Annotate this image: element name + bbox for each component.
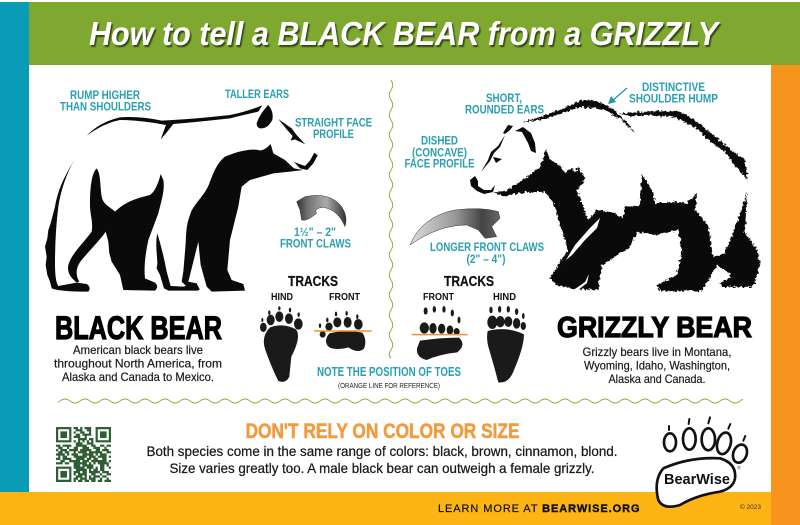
note on toes: (ORANGE LINE FOR REFERENCE) xyxy=(338,381,440,390)
text: black bear range: American black bears live xyxy=(73,343,203,357)
black bear labels: PROFILE xyxy=(313,129,354,141)
grizzly labels xyxy=(404,82,718,266)
bottom yellow band xyxy=(0,492,771,525)
grizzly labels: ROUNDED EARS xyxy=(465,104,544,116)
black bear labels: TALLER EARS xyxy=(225,89,289,101)
paw tracks xyxy=(260,306,526,382)
title banner xyxy=(29,2,800,65)
black bear labels xyxy=(60,89,372,250)
tracks headings: FRONT xyxy=(329,291,360,303)
black bear labels: STRAIGHT FACE xyxy=(295,118,372,130)
left teal stripe xyxy=(0,2,29,492)
tracks headings: TRACKS xyxy=(288,274,338,290)
text: grizzly range: Grizzly bears live in Montana, xyxy=(582,345,732,359)
text: grizzly range: Wyoming, Idaho, Washington, xyxy=(584,358,730,372)
tracks headings: HIND xyxy=(493,291,516,303)
text: grizzly range: Alaska and Canada. xyxy=(608,372,706,386)
grizzly labels: SHOULDER HUMP xyxy=(629,94,718,106)
text: black bear range xyxy=(54,343,222,384)
grizzly labels: DISTINCTIVE xyxy=(642,82,705,94)
note on toes: NOTE THE POSITION OF TOES xyxy=(317,365,461,379)
callout text xyxy=(146,443,618,476)
footer link: LEARN MORE AT BEARWISE.ORG xyxy=(438,503,641,515)
tracks headings: FRONT xyxy=(423,291,454,303)
tracks headings: TRACKS xyxy=(444,274,494,290)
tracks headings xyxy=(271,274,516,303)
grizzly labels: (CONCAVE) xyxy=(412,148,467,160)
text: grizzly range xyxy=(582,345,732,386)
callout text: Size varies greatly too. A male black bear can outweigh a female grizzly. xyxy=(170,460,594,476)
black bear labels: RUMP HIGHER xyxy=(70,90,141,102)
QR code xyxy=(56,428,111,481)
copyright: © 2023 xyxy=(740,503,761,511)
BearWise logo: ® xyxy=(737,464,741,470)
arrow: shoulder hump xyxy=(608,88,627,104)
black bear claw xyxy=(297,195,346,227)
right orange stripe xyxy=(771,65,800,525)
grizzly labels: DISHED xyxy=(421,136,458,148)
grizzly labels: (2" – 4") xyxy=(466,254,506,266)
title: How to tell a BLACK BEAR from a GRIZZLY xyxy=(89,15,721,52)
black bear labels: 1½" – 2" xyxy=(294,227,336,239)
heading: black bear: BLACK BEAR xyxy=(55,310,222,346)
grizzly bear silhouette xyxy=(470,100,760,291)
BearWise logo: BearWise xyxy=(664,471,730,488)
callout text: Both species come in the same range of colors: black, brown, cinnamon, blond. xyxy=(146,443,618,459)
BearWise logo xyxy=(657,417,749,507)
grizzly labels: FACE PROFILE xyxy=(404,158,475,170)
grizzly claw xyxy=(410,209,500,245)
note on toes xyxy=(317,365,461,390)
tracks headings: HIND xyxy=(271,291,293,303)
text: black bear range: throughout North America, from xyxy=(54,356,222,370)
grizzly labels: SHORT, xyxy=(486,93,522,105)
text: black bear range: Alaska and Canada to Mexico. xyxy=(62,370,214,384)
black bear silhouette xyxy=(45,105,318,292)
black bear labels: THAN SHOULDERS xyxy=(60,102,151,114)
black bear labels: FRONT CLAWS xyxy=(280,238,351,250)
heading: grizzly bear: GRIZZLY BEAR xyxy=(557,312,752,344)
callout heading: DON'T RELY ON COLOR OR SIZE xyxy=(246,420,520,443)
grizzly labels: LONGER FRONT CLAWS xyxy=(430,242,544,254)
